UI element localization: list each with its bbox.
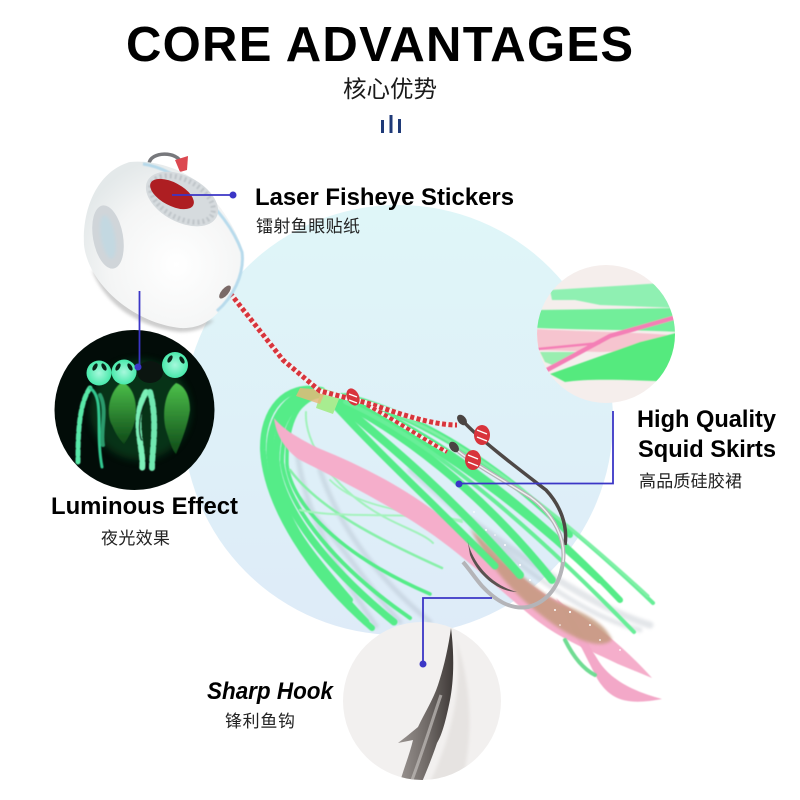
photo: red and white cord — [226, 288, 490, 470]
callout: sharp hook: Sharp Hook — [207, 678, 335, 705]
callout: sharp hook: 锋利鱼钩 — [225, 712, 295, 731]
head shadow — [92, 270, 214, 332]
photo: squid skirt assembly — [263, 388, 662, 702]
head ring — [149, 154, 181, 164]
cord knots — [344, 386, 490, 470]
icon: three bars — [381, 115, 401, 133]
green skirt strands right — [332, 396, 653, 675]
detail circle: sharp hook — [343, 622, 501, 782]
red pupil — [145, 173, 199, 215]
photo: lure head — [84, 154, 244, 332]
callout: high quality squid skirts: High Quality — [637, 406, 777, 433]
detail circle: luminous effect — [54, 330, 214, 490]
glowing lure heads — [86, 352, 188, 386]
glowing skirts — [78, 388, 154, 470]
laser eye — [137, 160, 227, 238]
side eye — [88, 203, 128, 271]
barb — [467, 537, 517, 592]
callout: high quality squid skirts — [456, 406, 777, 491]
hook point photo — [398, 628, 453, 782]
callout: laser fisheye stickers: 镭射鱼眼贴纸 — [256, 217, 360, 236]
pink tail — [556, 598, 662, 702]
pale blue background circle — [183, 205, 613, 635]
subtitle: 核心优势 — [343, 76, 437, 102]
callout: high quality squid skirts: 高品质硅胶裙 — [639, 472, 742, 491]
hook shadow — [432, 654, 469, 779]
callout: laser fisheye stickers — [172, 184, 514, 236]
callout: luminous effect — [51, 291, 238, 548]
callout: high quality squid skirts: Squid Skirts — [638, 436, 776, 463]
skirt collar — [316, 388, 341, 414]
skirt strand shadows — [296, 440, 650, 630]
pink strand — [274, 418, 652, 678]
rear hook shank — [462, 420, 566, 545]
head blue rim — [143, 164, 242, 311]
green skirt strands left loop — [263, 389, 462, 628]
front hook — [453, 447, 563, 608]
hook eyes — [455, 413, 469, 427]
glitter tan patch — [470, 528, 612, 644]
photo: assist hooks — [447, 413, 566, 608]
callout: sharp hook — [207, 598, 492, 731]
cord socket — [217, 284, 233, 300]
callout: laser fisheye stickers: Laser Fisheye Stickers — [255, 184, 514, 211]
callout: luminous effect: 夜光效果 — [101, 529, 170, 548]
title: CORE ADVANTAGES — [126, 18, 633, 72]
callout: luminous effect: Luminous Effect — [51, 493, 238, 520]
head body — [84, 162, 244, 328]
glitter dots — [473, 511, 621, 651]
detail circle: squid skirts — [536, 265, 680, 403]
green ambient glow — [90, 360, 190, 460]
dim bushes — [109, 382, 190, 454]
